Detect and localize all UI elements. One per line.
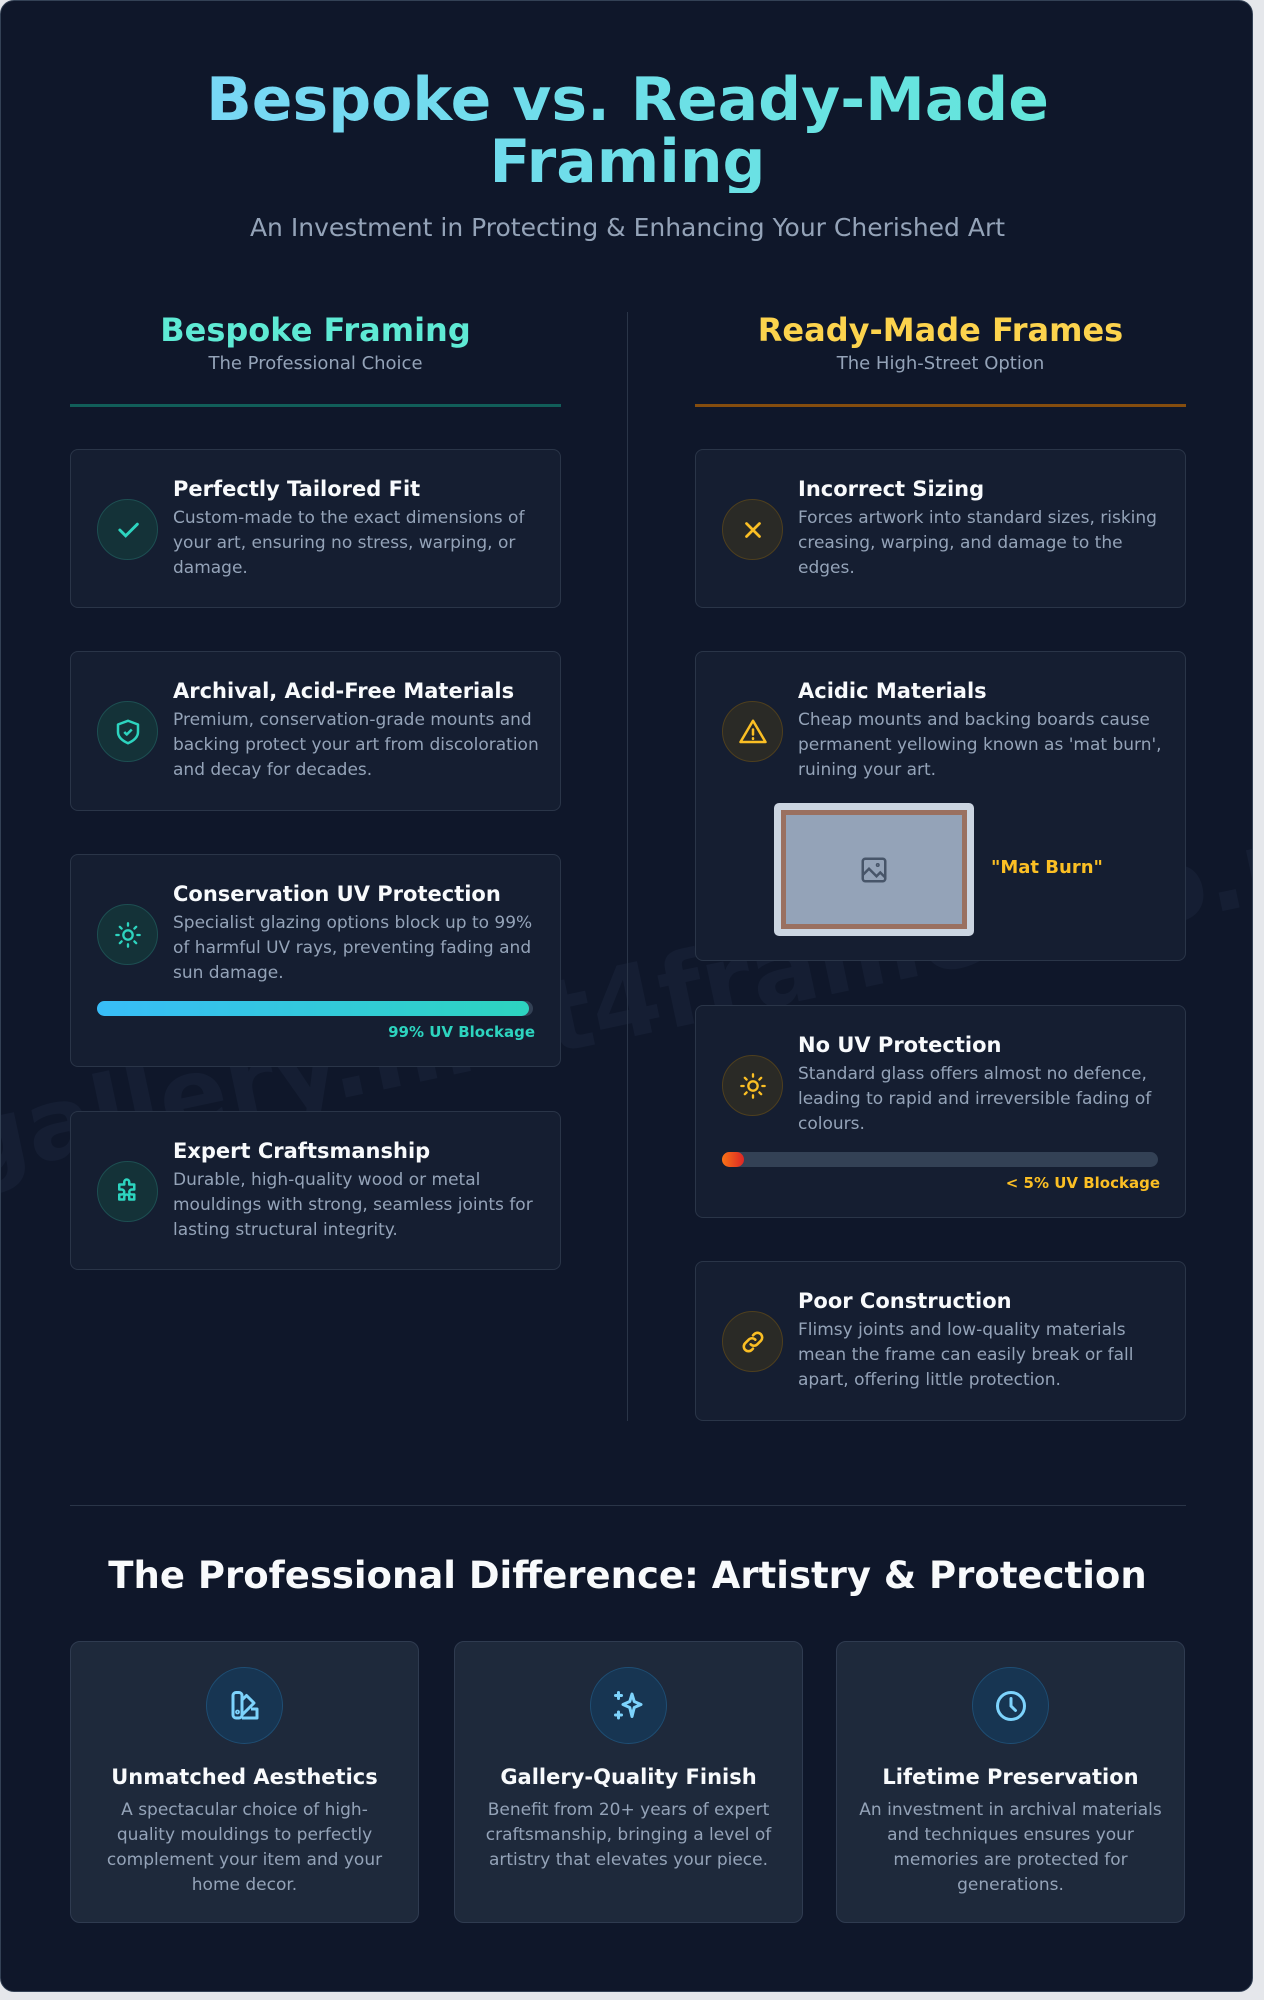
heading: bespoke: The Professional Choice: [208, 353, 423, 374]
card: acidic materials: [695, 651, 1186, 961]
card: incorrect sizing: Incorrect Sizing: [798, 477, 984, 501]
title: Framing: [490, 127, 765, 197]
card: acidic materials: Acidic Materials: [798, 679, 987, 703]
card: incorrect sizing: Forces artwork into standard sizes, risking creasing, warping, and damage to the edges.: [798, 508, 1157, 578]
card: lifetime preservation: An investment in archival materials and techniques ensures your memories are protected for generations.: [859, 1800, 1162, 1895]
card: incorrect sizing: [695, 449, 1186, 608]
icon: swatch: [206, 1667, 283, 1744]
icon: warning: [722, 701, 783, 762]
card: no UV: No UV Protection: [798, 1033, 1001, 1057]
card: UV protection: Conservation UV Protection: [173, 882, 501, 906]
icon: puzzle: [97, 1161, 158, 1222]
icon: sun: [722, 1055, 783, 1116]
card: gallery-quality finish: [454, 1641, 803, 1923]
card: unmatched aesthetics: Unmatched Aesthetics: [111, 1765, 378, 1789]
card: gallery-quality finish: Gallery-Quality Finish: [500, 1765, 757, 1789]
illustration: mat burn frame: [774, 803, 974, 936]
heading: bespoke: [70, 311, 561, 407]
label: 5%: < 5% UV Blockage: [1006, 1174, 1160, 1192]
icon: clock: [972, 1667, 1049, 1744]
card: craftsmanship: Expert Craftsmanship: [173, 1139, 430, 1163]
card: no UV: [695, 1005, 1186, 1218]
card: unmatched aesthetics: [70, 1641, 419, 1923]
column divider: [627, 312, 628, 1421]
title: [1, 69, 1254, 193]
heading: bespoke: Bespoke Framing: [160, 311, 471, 349]
card: archival: [70, 651, 561, 811]
icon: x: [722, 499, 783, 560]
card: gallery-quality finish: Benefit from 20+ years of expert craftsmanship, bringing a level of artistry that elevates your piece.: [486, 1800, 771, 1870]
card: craftsmanship: Durable, high-quality wood or metal mouldings with strong, seamless joints for lasting structural integrity.: [173, 1170, 533, 1240]
icon: sparkles: [590, 1667, 667, 1744]
icon: check: [97, 499, 158, 560]
card: lifetime preservation: Lifetime Preservation: [882, 1765, 1139, 1789]
card: poor construction: [695, 1261, 1186, 1421]
icon: shield: [97, 701, 158, 762]
card: perfectly tailored fit: Perfectly Tailored Fit: [173, 477, 420, 501]
card: acidic materials: Cheap mounts and backing boards cause permanent yellowing known as 'mat burn', ruining your art.: [798, 710, 1162, 780]
section divider: [70, 1505, 1186, 1506]
heading: ready-made: [695, 311, 1186, 407]
card: lifetime preservation: [836, 1641, 1185, 1923]
card: archival: Premium, conservation-grade mounts and backing protect your art from discoloration and decay for decades.: [173, 710, 539, 780]
label: 99%: 99% UV Blockage: [388, 1023, 535, 1041]
card: UV protection: [70, 854, 561, 1067]
icon: link: [722, 1311, 783, 1372]
label: mat burn: "Mat Burn": [991, 857, 1103, 878]
title: Bespoke vs. Ready-Made: [206, 65, 1049, 135]
card: poor construction: Poor Construction: [798, 1289, 1012, 1313]
heading: ready-made: Ready-Made Frames: [758, 311, 1123, 349]
icon: sun: [97, 904, 158, 965]
bar: 99%: [97, 1001, 533, 1016]
heading: professional difference: The Professional Difference: Artistry & Protection: [108, 1554, 1147, 1597]
subtitle: An Investment in Protecting & Enhancing Your Cherished Art: [250, 213, 1005, 242]
card: UV protection: Specialist glazing options block up to 99% of harmful UV rays, preventing fading and sun damage.: [173, 913, 532, 983]
card: archival: Archival, Acid-Free Materials: [173, 679, 514, 703]
card: perfectly tailored fit: [70, 449, 561, 608]
heading: ready-made: The High-Street Option: [837, 353, 1044, 374]
card: poor construction: Flimsy joints and low-quality materials mean the frame can easily break or fall apart, offering little protection.: [798, 1320, 1134, 1390]
bar: 5%: [722, 1152, 1158, 1167]
card: no UV: Standard glass offers almost no defence, leading to rapid and irreversible fading of colours.: [798, 1064, 1151, 1134]
card: perfectly tailored fit: Custom-made to the exact dimensions of your art, ensuring no stress, warping, or damage.: [173, 508, 524, 578]
card: craftsmanship: [70, 1111, 561, 1270]
card: unmatched aesthetics: A spectacular choice of high-quality mouldings to perfectly complement your item and your home decor.: [107, 1800, 382, 1895]
